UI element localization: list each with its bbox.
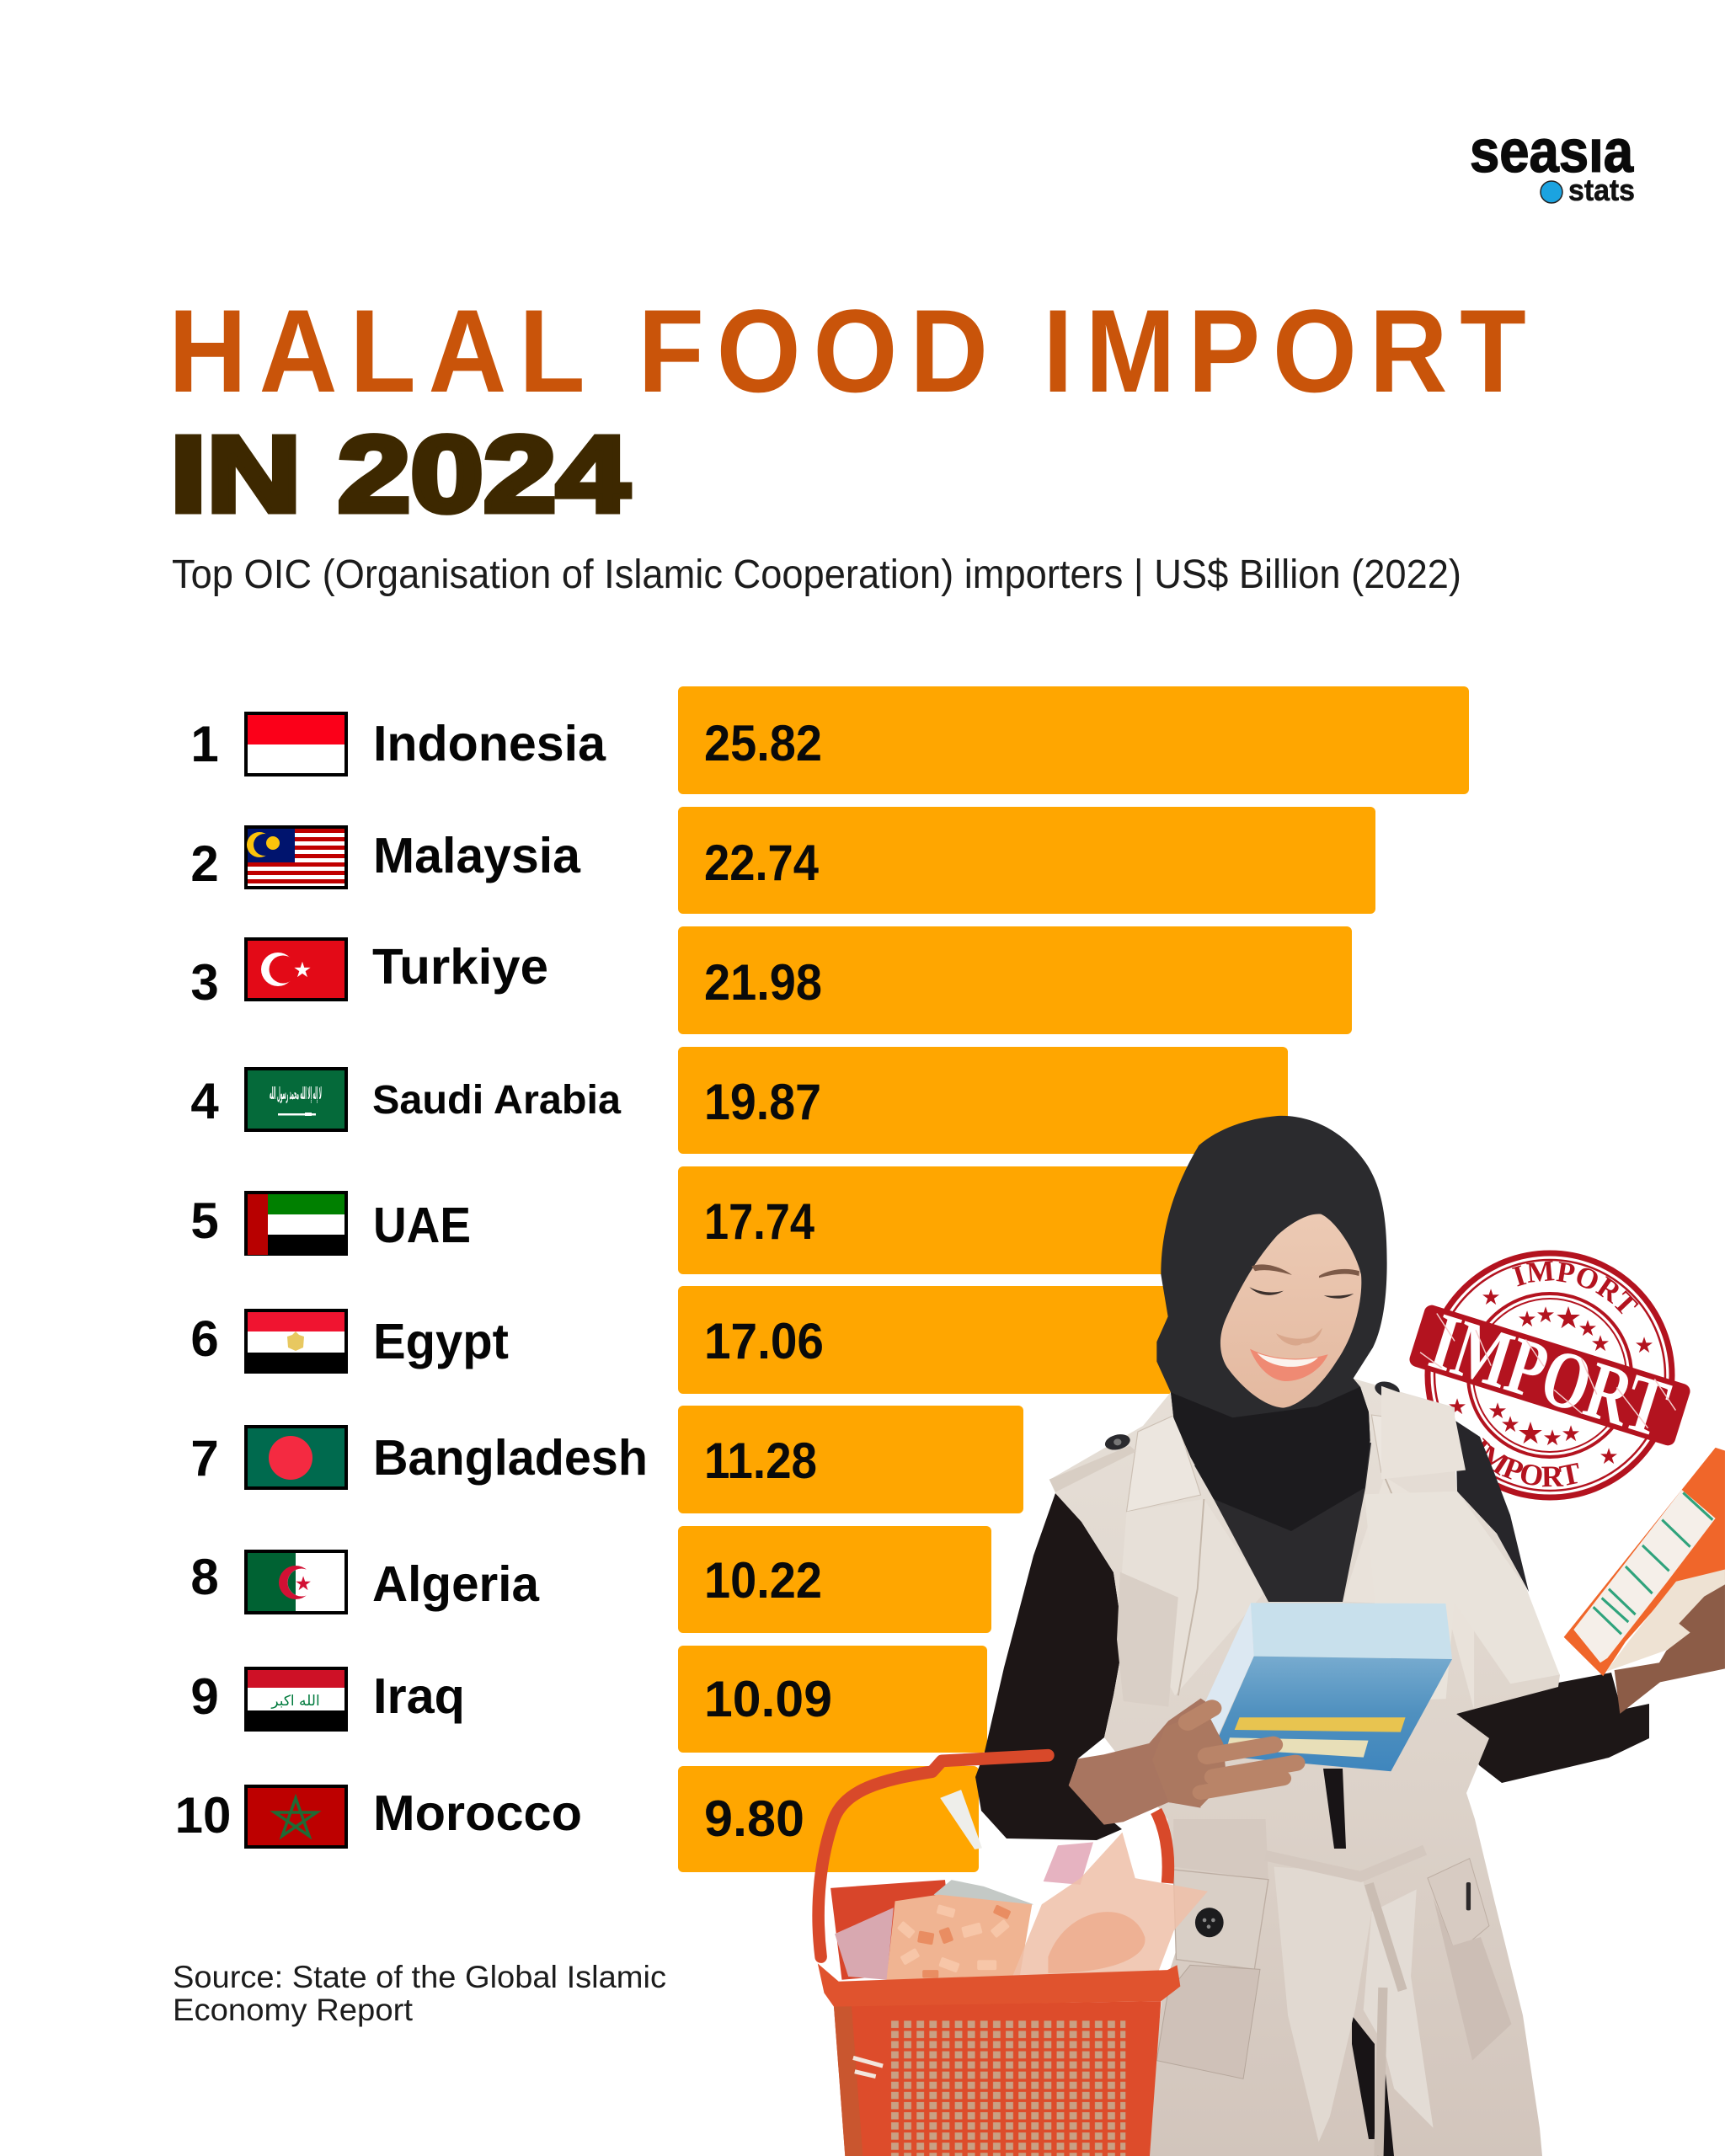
country names: Malaysia <box>373 828 581 883</box>
bar chart <box>678 686 1469 1872</box>
bar values: 25.82 <box>704 715 822 771</box>
import stamp: ★ <box>1555 1301 1582 1336</box>
face <box>1220 1214 1361 1408</box>
black left sleeve <box>975 1493 1124 1840</box>
title line 2: IN 2024 <box>170 414 629 535</box>
pink bags <box>835 1908 894 1980</box>
bar values: 17.06 <box>704 1313 824 1369</box>
bar values: 9.80 <box>704 1790 804 1847</box>
import stamp: ★ <box>1535 1303 1556 1328</box>
flag: Malaysia <box>246 827 346 888</box>
import stamp: IMPORT <box>1512 1261 1639 1314</box>
country names: Morocco <box>373 1785 582 1841</box>
fingers on box <box>1188 1708 1295 1792</box>
basket body <box>834 2001 1161 2156</box>
country names: Algeria <box>372 1556 540 1612</box>
import stamp: ★ <box>1578 1316 1598 1342</box>
chest undershirt <box>1194 1443 1371 1602</box>
snack bag <box>886 1895 1032 1982</box>
flag: UAE <box>246 1193 346 1255</box>
import stamp: ★ <box>1517 1307 1537 1332</box>
basket rim <box>818 1963 1180 2007</box>
rank numbers: 8 <box>190 1549 219 1605</box>
bar values: 10.22 <box>704 1552 822 1609</box>
country names: Turkiye <box>372 939 548 995</box>
bar values: 11.28 <box>704 1433 817 1489</box>
bar values: 22.74 <box>704 835 820 891</box>
snack pieces <box>897 1904 1010 1972</box>
far right handle <box>1156 1811 1168 1883</box>
flag: Bangladesh <box>246 1427 346 1488</box>
flag: Saudi Arabia <box>246 1069 346 1130</box>
rank numbers: 6 <box>190 1310 219 1367</box>
rank numbers: 10 <box>175 1787 231 1844</box>
import stamp: ★ <box>1542 1426 1562 1451</box>
rank numbers: 5 <box>190 1193 219 1249</box>
flag: Iraq <box>246 1668 346 1731</box>
import stamp: ★ <box>1500 1412 1520 1438</box>
rank numbers: 4 <box>190 1073 219 1129</box>
country names: Bangladesh <box>373 1430 648 1486</box>
country names: UAE <box>373 1198 471 1253</box>
import stamp: ★ <box>1561 1422 1581 1447</box>
bar values: 21.98 <box>704 954 822 1011</box>
palm over box edge <box>1152 1712 1226 1806</box>
subtitle: Top OIC (Organisation of Islamic Cooperation) importers | US$ Billion (2022) <box>172 552 1461 597</box>
country names <box>372 716 648 1841</box>
basket handle <box>819 1755 1048 1957</box>
rank numbers: 9 <box>190 1668 219 1725</box>
right shoulder button <box>1373 1379 1402 1401</box>
left forearm and hand <box>1069 1603 1452 1825</box>
import stamp: ★ <box>1634 1333 1654 1358</box>
import stamp: ★ <box>1599 1444 1619 1470</box>
flag: Turkiye <box>246 939 346 1000</box>
country names: Egypt <box>373 1314 509 1369</box>
flag: Algeria: ★ <box>295 1573 312 1595</box>
flag: Algeria <box>246 1551 346 1613</box>
import stamp: ★ <box>1517 1417 1544 1451</box>
bar values: 19.87 <box>704 1074 821 1130</box>
import stamp: ★ <box>1590 1331 1610 1357</box>
black strips below box <box>1323 1769 1394 2156</box>
flag: Turkiye: ★ <box>293 958 312 982</box>
hijab and scarf <box>1156 1116 1387 1531</box>
country names: Iraq <box>373 1668 465 1724</box>
bar values: 10.09 <box>704 1671 832 1727</box>
bar values <box>704 715 832 1847</box>
rank numbers <box>175 716 231 1844</box>
lower vest details <box>1156 1819 1511 2156</box>
flag: Morocco <box>246 1786 346 1847</box>
vest button <box>1195 1908 1224 1937</box>
blue box <box>1199 1603 1452 1771</box>
vest upper folds <box>1049 1415 1474 1710</box>
bar values: 17.74 <box>704 1193 815 1250</box>
plastic tag <box>940 1790 982 1849</box>
photo: woman holding boxes <box>975 1116 1725 2156</box>
rank numbers: 7 <box>190 1430 219 1486</box>
rank numbers: 2 <box>190 835 219 892</box>
source note <box>173 1960 666 2027</box>
logo: seasia stats: seasia <box>1470 119 1633 185</box>
logo: seasia stats <box>1471 138 1634 204</box>
source note: Source: State of the Global Islamic <box>173 1960 666 1994</box>
rank numbers: 1 <box>190 716 219 772</box>
orange box and right hand <box>1564 1448 1725 1714</box>
country names: Saudi Arabia <box>372 1078 621 1123</box>
title line 1: HALAL FOOD IMPORT <box>168 285 1526 417</box>
import stamp: ★ <box>1487 1399 1508 1424</box>
infographic canvas: لا إله إلا الله محمد رسول الله <box>270 1083 322 1103</box>
shopping basket <box>818 1755 1224 2156</box>
flag: Iraq: الله اكبر <box>270 1693 320 1710</box>
flag: Indonesia <box>246 713 346 775</box>
black right forearm <box>1456 1673 1649 1783</box>
import stamp: IMPORT <box>1482 1438 1578 1487</box>
logo: seasia stats: stats <box>1568 173 1635 207</box>
import stamp <box>1409 1250 1690 1501</box>
black upper right sleeve <box>1455 1421 1529 1592</box>
import stamp: ★ <box>1447 1395 1467 1420</box>
silver bag top <box>934 1880 1033 1911</box>
rank numbers: 3 <box>190 954 219 1011</box>
country names: Indonesia <box>373 716 606 771</box>
basket mesh <box>889 2019 1125 2156</box>
white marks <box>853 2057 883 2077</box>
beige vest <box>1049 1379 1560 2156</box>
vest right drape <box>1365 1386 1560 1701</box>
basket far wall <box>830 1880 954 1980</box>
flag: Egypt <box>246 1310 346 1373</box>
plastic bag <box>1011 1833 1208 1980</box>
source note: Economy Report <box>173 1993 414 2027</box>
import stamp: ★ <box>1481 1285 1501 1310</box>
